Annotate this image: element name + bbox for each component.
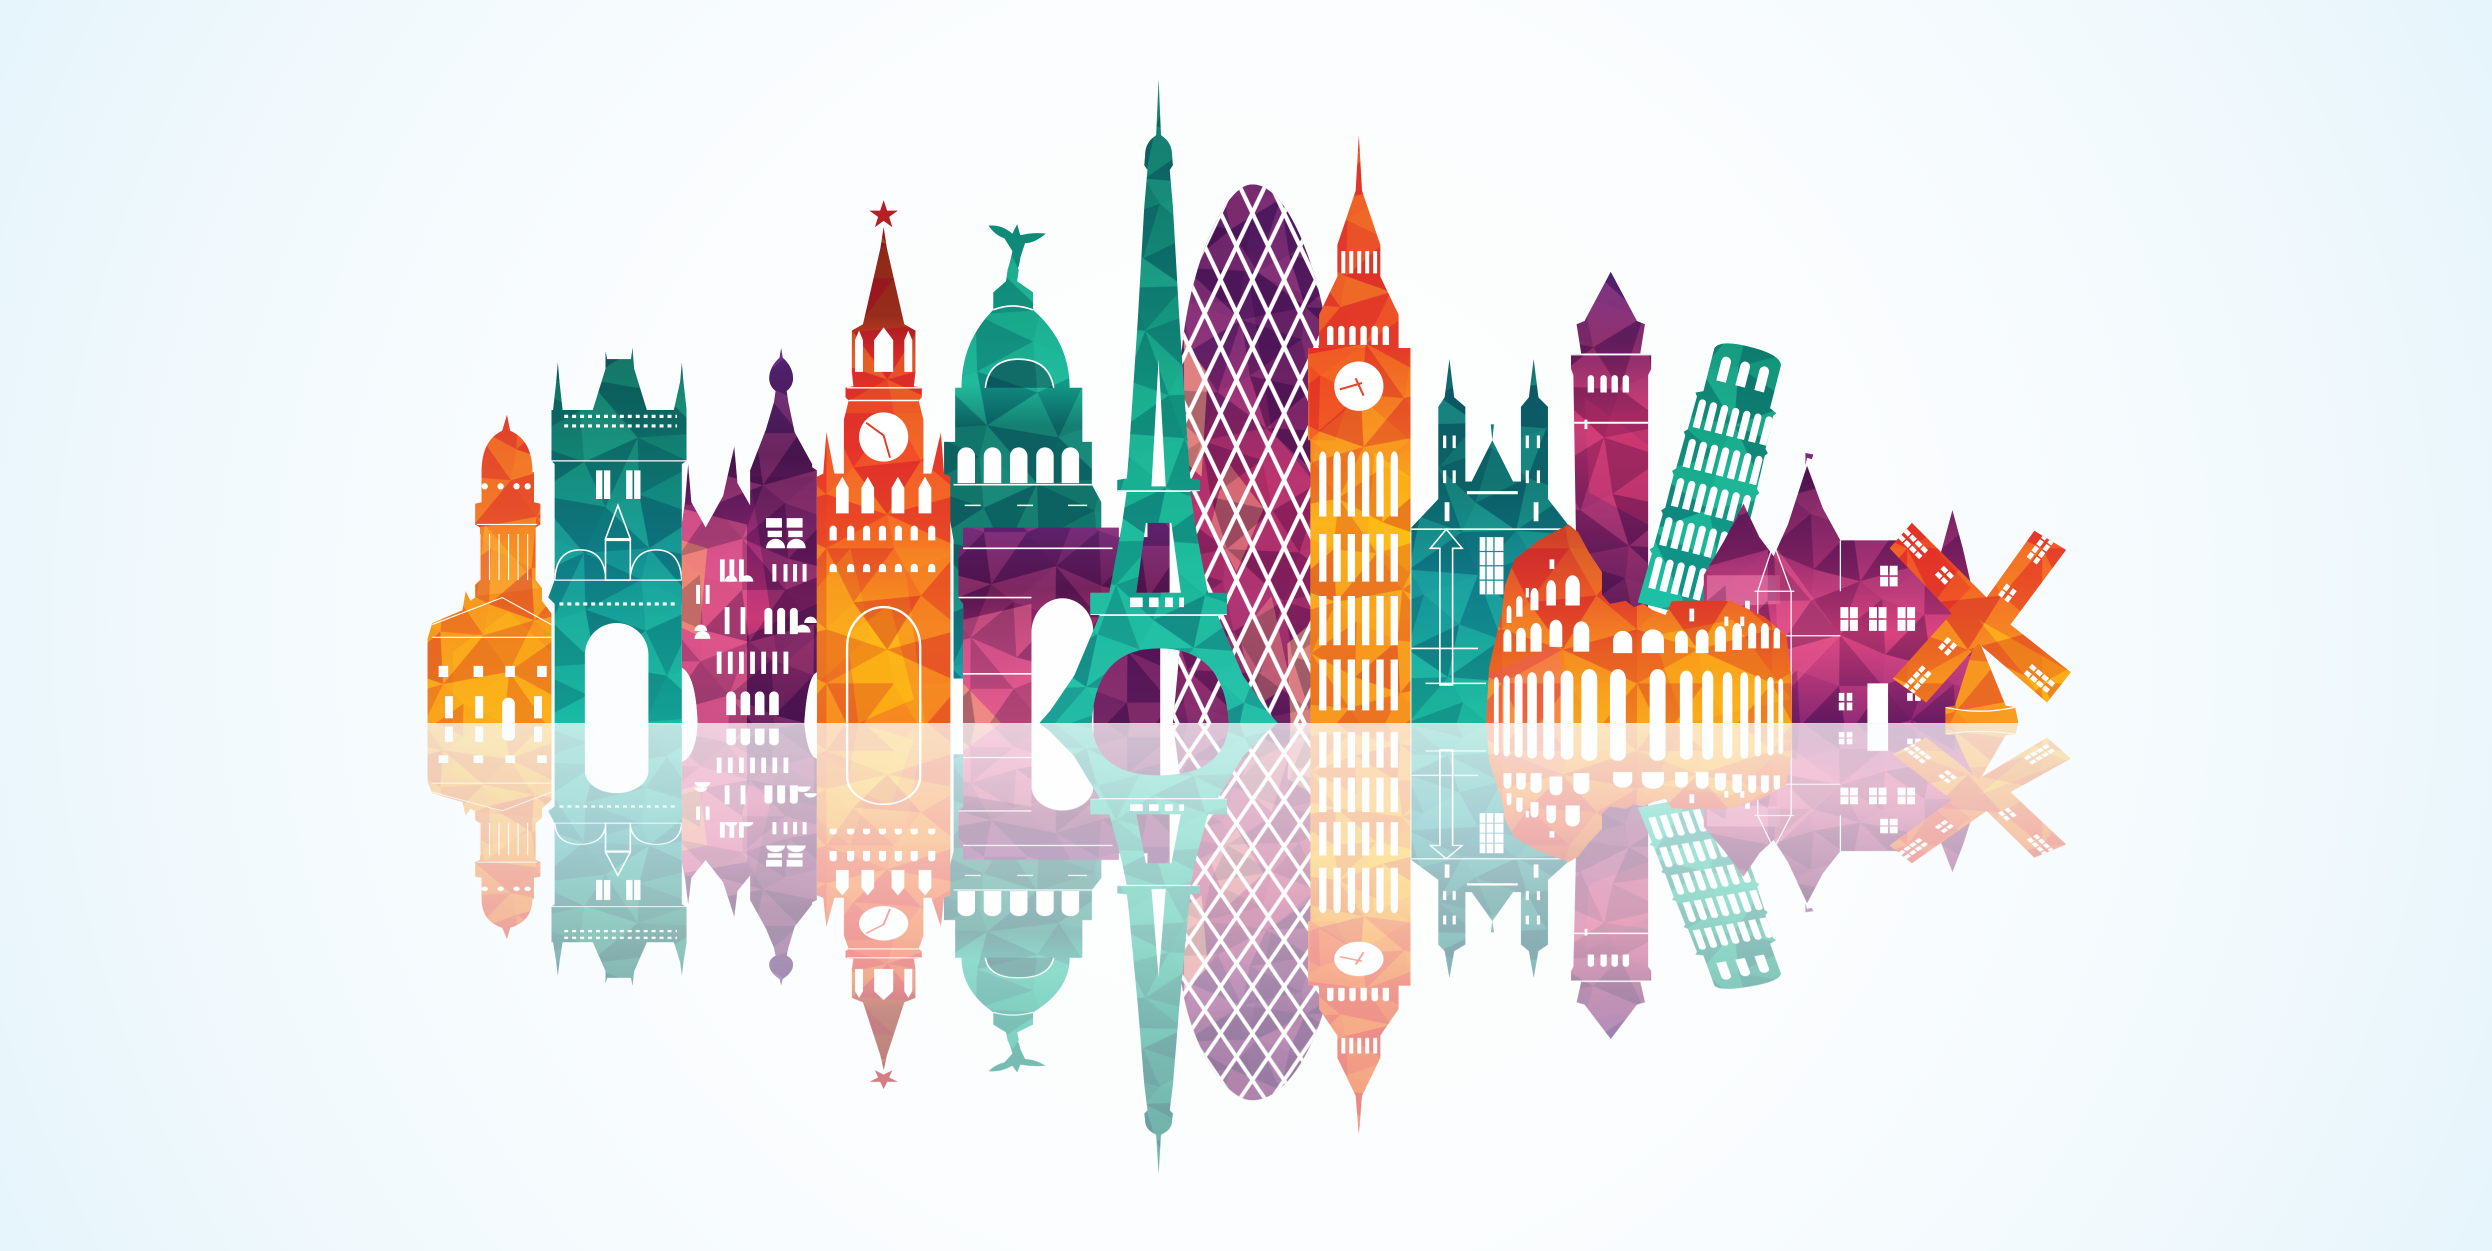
landmark: baroque church (421, 410, 556, 728)
dome and colonnade (938, 254, 1112, 683)
clock face (859, 412, 908, 462)
flag (1805, 453, 1813, 466)
landmark: onion dome church (675, 342, 822, 726)
church body (675, 342, 822, 726)
star on spire (869, 200, 898, 227)
landmark: gothic cathedral (1407, 356, 1575, 726)
landmark: windmill (1885, 518, 2076, 728)
tower body (1303, 133, 1414, 725)
clock face (1334, 362, 1383, 411)
mirrored water reflection of skyline (421, 718, 2076, 1176)
windmill body (1939, 633, 2025, 728)
landmark: Prague bridge tower (545, 346, 691, 728)
landmark: Big Ben (1303, 133, 1414, 725)
tower body (545, 346, 691, 728)
tower body (814, 226, 954, 726)
landmark: Kremlin clock tower (814, 200, 954, 726)
landmark: Colosseum (1481, 521, 1796, 728)
skyline of landmarks (421, 76, 2076, 731)
landmark: Eiffel tower (1033, 76, 1287, 728)
landmark: brick tower (1565, 270, 1654, 620)
landmark: triumphal arch (954, 517, 1176, 726)
tower body (1565, 270, 1654, 620)
small teal spire (1573, 464, 1594, 564)
landmark: leaning tower of Pisa (1630, 327, 1803, 633)
landmark: gherkin tower (1168, 175, 1327, 731)
statue on dome (989, 224, 1046, 271)
church body (421, 410, 556, 728)
landmark: domed palace with statue (938, 224, 1112, 683)
landmark: castle with roofs (1701, 453, 1979, 726)
castle body (1701, 461, 1979, 726)
windmill sails (1885, 518, 2076, 709)
